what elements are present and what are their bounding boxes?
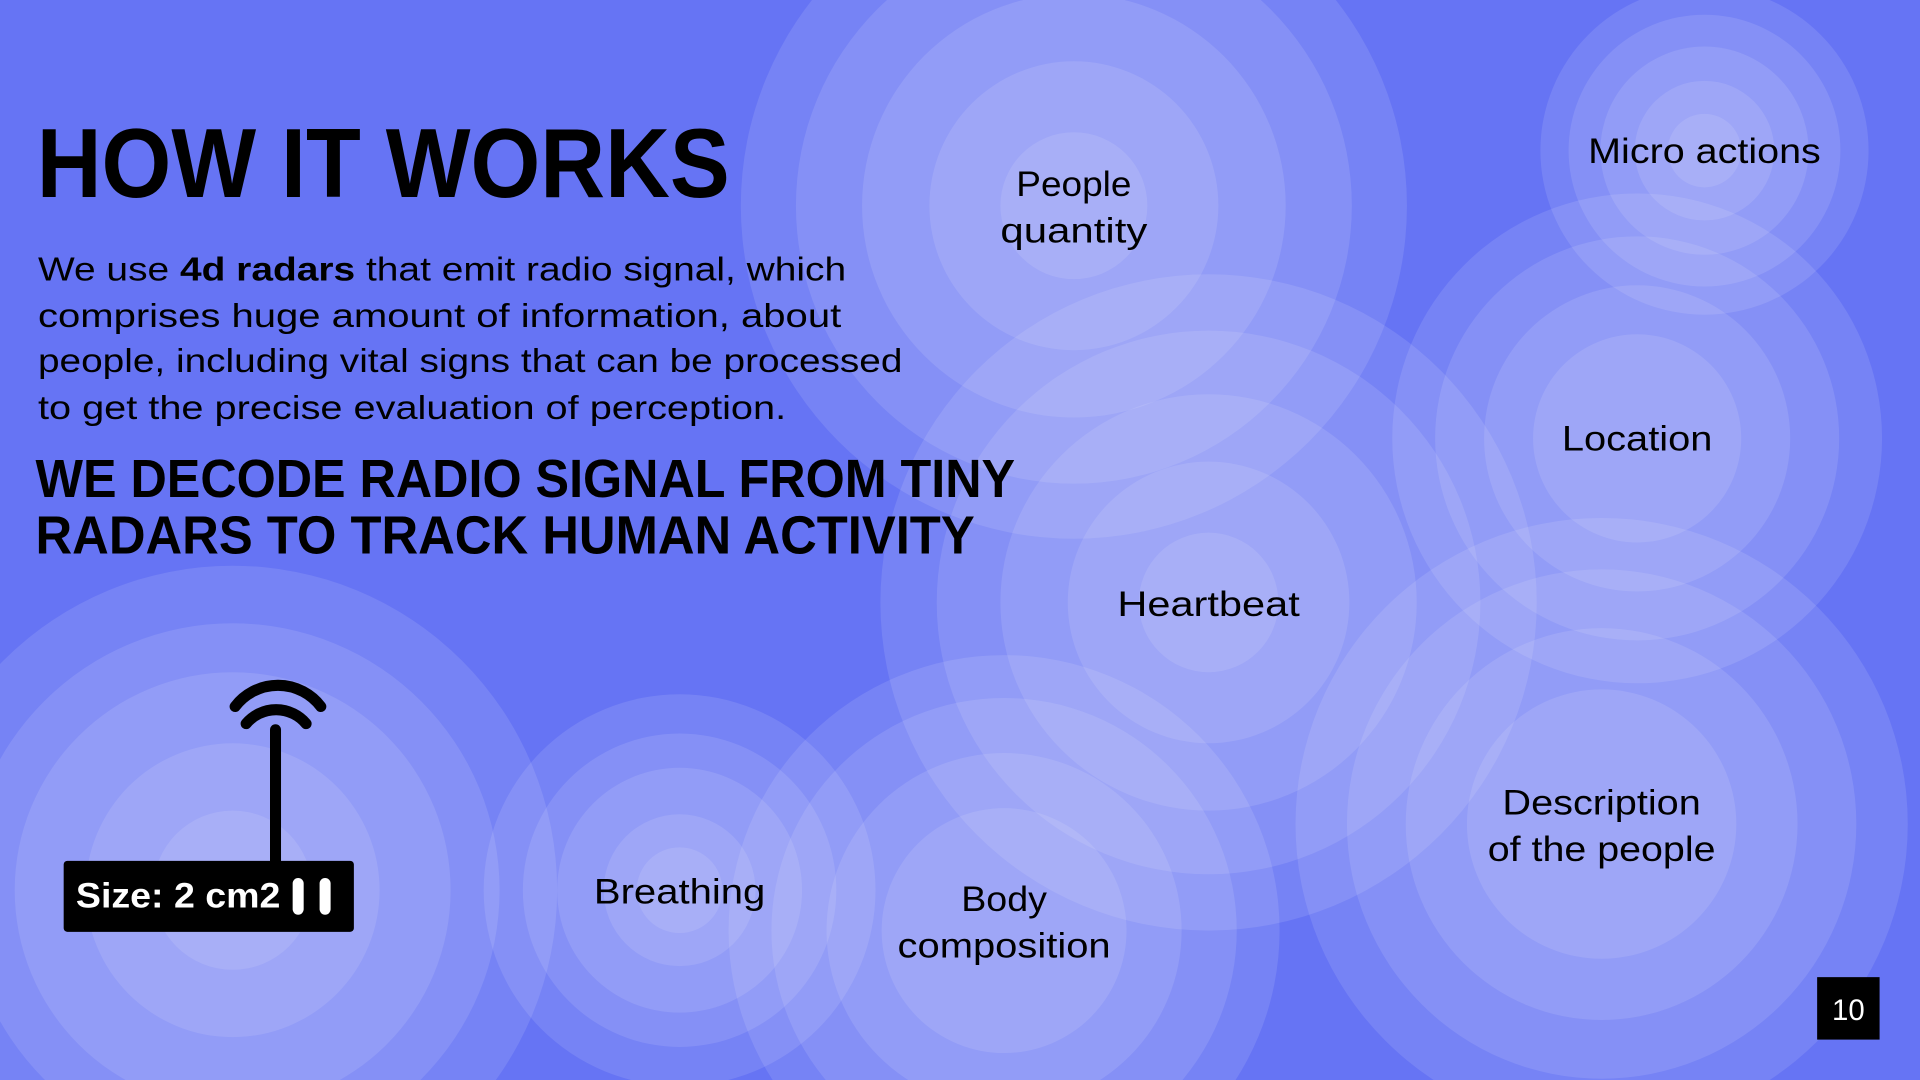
labels: Location <box>1562 420 1712 459</box>
title: HOW IT WORKS <box>37 108 730 218</box>
icon: radar device <box>64 685 354 932</box>
rings: breathing <box>484 694 876 1080</box>
rings: description <box>1296 518 1908 1080</box>
page number: 10 <box>1832 994 1865 1027</box>
rings: radar <box>0 566 557 1080</box>
subheading: RADARS TO TRACK HUMAN ACTIVITY <box>36 505 975 565</box>
rings: micro actions <box>1540 0 1869 315</box>
paragraph: to get the precise evaluation of perception. <box>38 390 786 427</box>
labels: composition <box>898 927 1111 966</box>
labels <box>594 132 1821 966</box>
labels: of the people <box>1488 830 1716 869</box>
labels: Breathing <box>594 873 765 912</box>
labels: quantity <box>1000 211 1148 250</box>
labels: Body <box>961 880 1048 919</box>
labels: Heartbeat <box>1117 585 1300 624</box>
paragraph: people, including vital signs that can be processed <box>38 343 902 380</box>
rings: body composition <box>729 655 1280 1080</box>
paragraph <box>38 251 902 427</box>
rings: location <box>1392 193 1882 683</box>
paragraph: comprises huge amount of information, about <box>38 298 842 335</box>
labels: Micro actions <box>1588 132 1821 171</box>
page number <box>1817 977 1880 1040</box>
subheading: WE DECODE RADIO SIGNAL FROM TINY <box>36 449 1015 509</box>
paragraph: We use 4d radars that emit radio signal, which <box>38 251 846 288</box>
labels: People <box>1016 165 1131 204</box>
rings: heartbeat <box>880 274 1537 931</box>
icon: radar device: Size: 2 cm2 <box>76 875 280 915</box>
subheading <box>36 449 1015 565</box>
rings: people quantity <box>741 0 1407 539</box>
labels: Description <box>1502 783 1701 822</box>
